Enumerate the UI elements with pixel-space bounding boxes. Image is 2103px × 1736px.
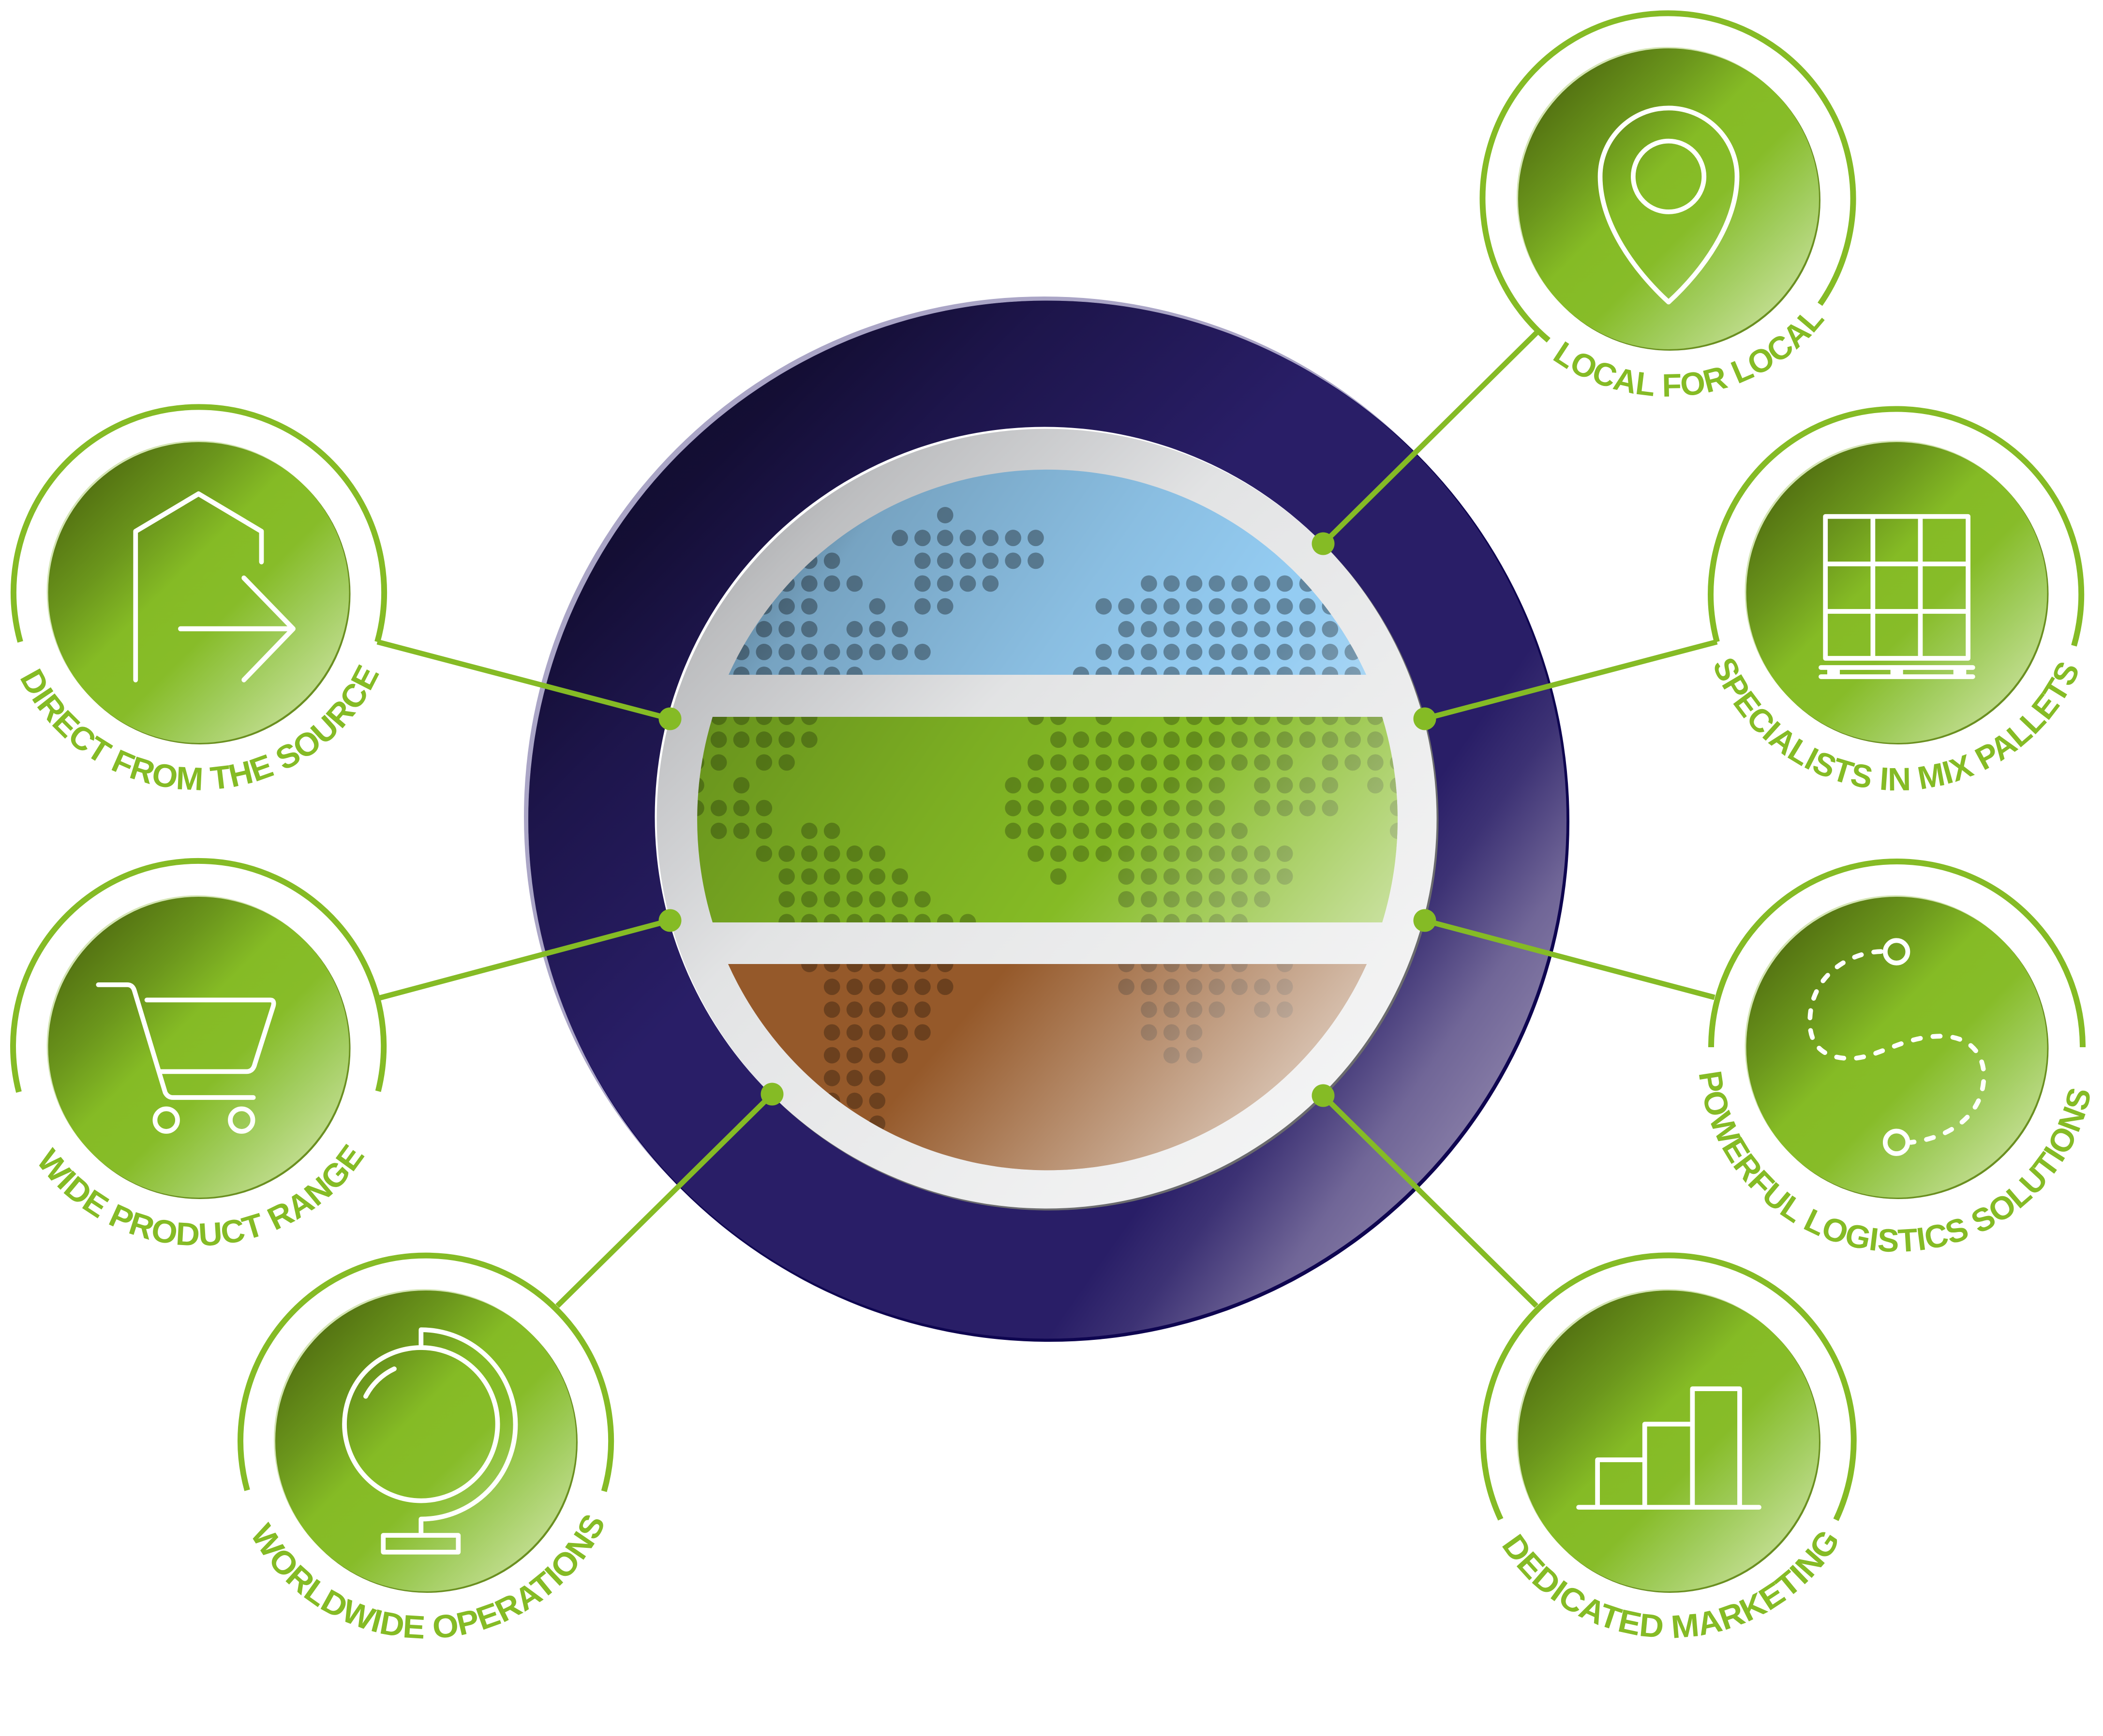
connector end dots xyxy=(659,532,1436,1107)
connector lines xyxy=(377,333,1717,1306)
inner silver disc xyxy=(655,427,1439,1210)
icon: pallet grid xyxy=(1821,517,1973,677)
panel: direct from the source xyxy=(11,404,387,790)
outer ring: navy disc xyxy=(524,297,1569,1342)
panel: wide product range xyxy=(13,861,384,1253)
icon: desk globe xyxy=(344,1330,515,1552)
panel: specialists in mix pallets xyxy=(1708,406,2084,790)
icon: dashed route xyxy=(1810,940,1984,1154)
panel: worldwide operations xyxy=(240,1256,612,1646)
band: blue sky with dotted map xyxy=(729,469,1366,675)
label: local for local: LOCAL FOR LOCAL xyxy=(1553,314,1825,397)
icon: warehouse with arrow xyxy=(135,494,293,680)
label: worldwide operations: WORLDWIDE OPERATIONS xyxy=(253,1515,603,1639)
label: direct from the source: DIRECT FROM THE SOURCE xyxy=(20,665,379,790)
icon: map pin xyxy=(1600,108,1737,302)
label: specialists in mix pallets: SPECIALISTS IN MIX PALLETS xyxy=(1715,659,2077,790)
icon: shopping cart xyxy=(98,985,274,1131)
panel: powerful logistics solutions xyxy=(1699,859,2090,1252)
band: green land with dotted map xyxy=(697,717,1398,922)
panel: dedicated marketing xyxy=(1483,1255,1854,1646)
central globe badge xyxy=(524,297,1569,1342)
label: powerful logistics solutions: POWERFUL LOGISTICS SOLUTIONS xyxy=(1699,1071,2090,1252)
icon: bar chart xyxy=(1579,1389,1759,1507)
band: brown soil with dotted map xyxy=(728,964,1367,1171)
label: dedicated marketing: DEDICATED MARKETING xyxy=(1502,1532,1837,1638)
label: wide product range: WIDE PRODUCT RANGE xyxy=(39,1143,365,1246)
panel: local for local xyxy=(1479,10,1856,397)
